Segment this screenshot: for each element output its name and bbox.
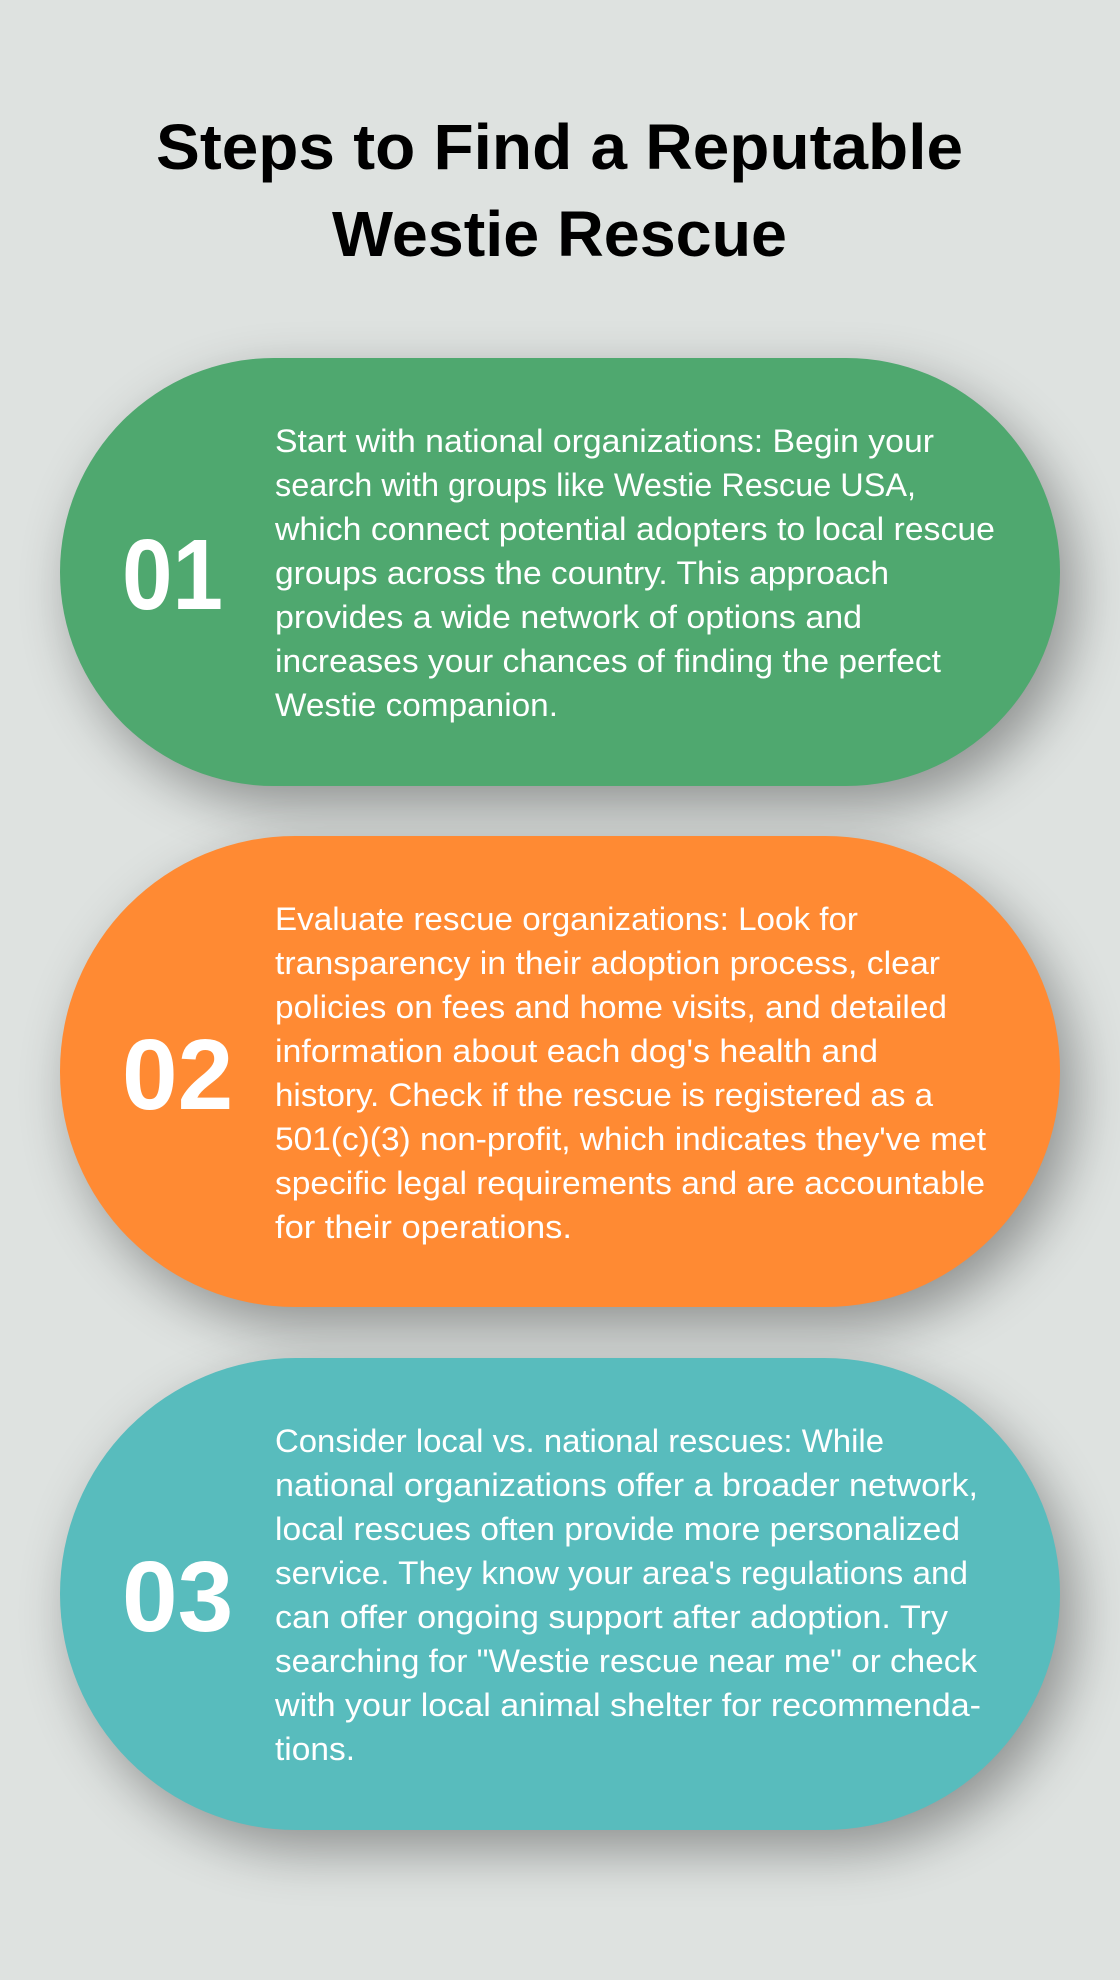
text block: step 03 [274, 1423, 981, 1767]
title: Westie Rescue [332, 198, 787, 270]
text block: step 03: searching for "Westie rescue near me" or check [275, 1643, 978, 1679]
text block: step 02: specific legal requirements and are accountable [275, 1165, 985, 1201]
text block: step 01: increases your chances of finding the perfect [275, 643, 941, 679]
text block: step 02: Evaluate rescue organizations: Look for [275, 901, 858, 937]
text block: step 03: tions. [275, 1731, 355, 1767]
text block: step 01: groups across the country. This approach [275, 555, 889, 591]
number: 01: 01 [122, 519, 223, 631]
text block: step 02 [275, 901, 986, 1245]
text block: step 03: with your local animal shelter for recommenda- [274, 1687, 981, 1723]
panel: step 03 [60, 1358, 1060, 1830]
text block: step 02: information about each dog's health and [275, 1033, 878, 1069]
text block: step 03: local rescues often provide more personalized [275, 1511, 960, 1547]
text block: step 03: can offer ongoing support after adoption. Try [275, 1599, 949, 1635]
text block: step 03: service. They know your area's regulations and [275, 1555, 968, 1591]
text block: step 01 [274, 423, 995, 723]
text block: step 01: provides a wide network of options and [275, 599, 862, 635]
title: Steps to Find a Reputable [156, 111, 963, 183]
panel: step 02 [60, 836, 1060, 1307]
number: 02: 02 [122, 1019, 233, 1131]
text block: step 01: Westie companion. [275, 687, 558, 723]
panel: step 01 [60, 358, 1060, 786]
pill: step 03 background [60, 1358, 1060, 1830]
text block: step 01: Start with national organizations: Begin your [275, 423, 934, 459]
text block: step 02: transparency in their adoption process, clear [275, 945, 940, 981]
pill: step 01 background [60, 358, 1060, 786]
text block: step 01: search with groups like Westie Rescue USA, [275, 467, 916, 503]
text block: step 03: national organizations offer a broader network, [275, 1467, 978, 1503]
text block: step 02: for their operations. [275, 1209, 572, 1245]
text block: step 02: history. Check if the rescue is registered as a [275, 1077, 934, 1113]
text block: step 02: policies on fees and home visits, and detailed [275, 989, 947, 1025]
text block: step 03: Consider local vs. national rescues: While [275, 1423, 884, 1459]
pill: step 02 background [60, 836, 1060, 1307]
number: 03: 03 [122, 1541, 233, 1653]
text block: step 02: 501(c)(3) non-profit, which indicates they've met [275, 1121, 986, 1157]
title [156, 111, 963, 270]
text block: step 01: which connect potential adopters to local rescue [274, 511, 995, 547]
